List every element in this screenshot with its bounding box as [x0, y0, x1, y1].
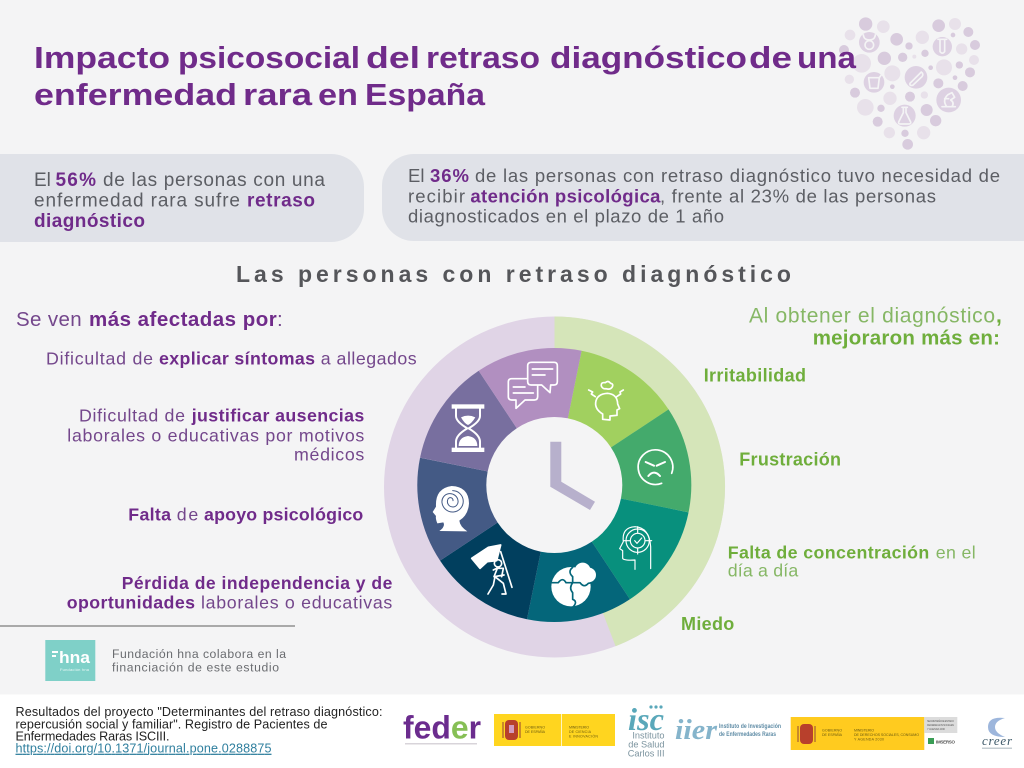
- left item: explicar síntomas: Dificultad de: [46, 348, 153, 368]
- logo: Gobierno de España, Ministerio de Ciencia: MINISTERIO: [569, 726, 589, 730]
- logo: feder: feder: [403, 710, 481, 746]
- left item: justificar ausencias: justificar ausencias: [191, 406, 364, 426]
- right item: Falta de concentración: Falta de concentración: [728, 542, 929, 562]
- logo: Gobierno de España, Ministerio de Derechos Sociales: IMSERSO: [936, 740, 955, 744]
- left item: justificar ausencias: médicos: [294, 445, 364, 465]
- wheel segments: [387, 317, 722, 653]
- text: Fundación hna note: [112, 647, 286, 675]
- logo: Gobierno de España, Ministerio de Ciencia: DE CIENCIA: [569, 730, 592, 734]
- title: de: [749, 40, 792, 75]
- logo: Instituto de Salud Carlos III: [628, 701, 664, 758]
- logo: Gobierno de España, Ministerio de Ciencia: GOBIERNO: [525, 726, 545, 730]
- panel: 36% stat: 36%: [430, 165, 469, 186]
- logo: Gobierno de España, Ministerio de Derechos Sociales: SECRETARÍA DE ESTADO: [927, 719, 954, 723]
- logo: Gobierno de España, Ministerio de Derechos Sociales: GOBIERNO: [822, 728, 842, 732]
- logo: Instituto de Investigación de Enfermedades Raras: iier: [675, 715, 718, 746]
- left column heading: más afectadas por: [89, 308, 277, 331]
- right column heading: [749, 304, 1002, 349]
- icon: hourglass: [452, 404, 484, 452]
- title: una: [797, 40, 857, 75]
- panel: 36% stat: [382, 154, 1024, 241]
- text: footer source: repercusión social y familiar". Registro de Pacientes de: [16, 717, 328, 731]
- right item: Falta de concentración: día a día: [728, 561, 798, 581]
- title: psicosocial: [178, 40, 360, 75]
- chart: clock wheel: [384, 316, 725, 658]
- panel: 36% stat: atención psicológica: [470, 185, 661, 206]
- wheel icons: [433, 362, 673, 607]
- panel: 56% stat: 56%: [56, 170, 96, 191]
- text: Fundación hna note: financiación de este estudio: [112, 661, 279, 675]
- title: rara: [243, 77, 313, 112]
- left item: justificar ausencias: [67, 406, 364, 465]
- logo: Instituto de Investigación de Enfermedades Raras: [675, 715, 781, 746]
- logo: Gobierno de España, Ministerio de Derechos Sociales: Y AGENDA 2030: [854, 738, 884, 742]
- left item: explicar síntomas: a allegados: [321, 348, 417, 368]
- right column heading: mejoraron más en:: [813, 326, 1000, 349]
- title: diagnóstico: [550, 40, 747, 75]
- right item: Frustración: Frustración: [739, 450, 841, 470]
- icon: puzzle: [551, 563, 596, 607]
- icon: person with flag: [472, 545, 512, 594]
- right item: Falta de concentración: [728, 542, 976, 581]
- panel: 36% stat: , frente al 23% de las personas: [660, 185, 936, 206]
- footer background: [0, 694, 1024, 768]
- left item: pérdida de independencia: Pérdida de independencia y de: [122, 573, 393, 593]
- panel: 36% stat: El: [408, 165, 424, 186]
- panel: 36% stat: de las personas con retraso diagnóstico tuvo necesidad de: [475, 165, 1000, 186]
- logo: Fundación hna: [45, 640, 95, 681]
- panel: 36% stat: diagnosticados en el plazo de 1 año: [408, 205, 724, 226]
- icon: head with spiral: [433, 486, 469, 531]
- heading: Las personas con retraso diagnóstico: Las personas con retraso diagnóstico: [236, 261, 791, 287]
- text: footer source: Resultados del proyecto "Determinantes del retraso diagnóstico:: [16, 705, 382, 719]
- panel: 56% stat: de las personas con una: [103, 170, 325, 191]
- icon: speech bubbles: [508, 362, 557, 408]
- panel: 56% stat: retraso: [247, 191, 315, 212]
- text: footer source: Enfermedades Raras ISCIII.: [16, 730, 170, 744]
- logo: Gobierno de España, Ministerio de Derechos Sociales: DE ESPAÑA: [822, 732, 843, 737]
- left item: apoyo psicológico: apoyo psicológico: [204, 505, 363, 525]
- logo: Instituto de Salud Carlos III: de Salud: [628, 740, 664, 750]
- icon: heart of dots with science icons: [839, 17, 980, 150]
- logo: Gobierno de España, Ministerio de Ciencia: [494, 714, 615, 746]
- left item: pérdida de independencia: oportunidades: [67, 592, 195, 612]
- logo: Instituto de Investigación de Enfermedades Raras: Instituto de Investigación: [719, 724, 781, 730]
- left item: justificar ausencias: laborales o educativas por motivos: [67, 426, 364, 446]
- logo: Fundación hna: hna: [59, 648, 91, 667]
- left item: apoyo psicológico: de: [177, 505, 198, 525]
- icon: irritated head: [589, 381, 623, 420]
- logo: Gobierno de España, Ministerio de Ciencia: DE ESPAÑA: [525, 729, 546, 734]
- logo: Instituto de Salud Carlos III: Instituto: [632, 730, 664, 740]
- logo: creer: [982, 718, 1013, 749]
- left item: pérdida de independencia: laborales o educativas: [201, 592, 392, 612]
- title: Impacto: [34, 40, 170, 75]
- logo: Gobierno de España, Ministerio de Ciencia: E INNOVACIÓN: [569, 734, 598, 738]
- text: footer source: [16, 705, 382, 756]
- title: en: [318, 77, 358, 112]
- logo: Fundación hna: Fundación hna: [60, 667, 90, 672]
- title: enfermedad: [34, 77, 237, 112]
- right item: Falta de concentración: en el: [936, 542, 976, 562]
- logo: Gobierno de España, Ministerio de Derechos Sociales: DE DERECHOS SOCIALES, CONSUMO: [854, 733, 919, 737]
- panel: 36% stat: recibir: [408, 185, 465, 206]
- logo: Gobierno de España, Ministerio de Derechos Sociales: DE DERECHOS SOCIALES: [927, 723, 954, 727]
- logo: Gobierno de España, Ministerio de Derechos Sociales: [791, 717, 957, 750]
- right item: Irritabilidad: Irritabilidad: [704, 366, 806, 386]
- right item: Miedo: Miedo: [681, 614, 734, 634]
- logo: Gobierno de España, Ministerio de Derechos Sociales: MINISTERIO: [854, 728, 874, 732]
- left column heading: :: [277, 308, 283, 331]
- panel: 56% stat: [0, 154, 364, 242]
- left column heading: Se ven: [16, 308, 82, 331]
- left item: justificar ausencias: Dificultad de: [79, 406, 185, 426]
- left item: pérdida de independencia: [67, 573, 393, 612]
- panel: 56% stat: enfermedad rara sufre: [34, 191, 240, 212]
- clock hands: [550, 442, 595, 510]
- logo: Instituto de Investigación de Enfermedades Raras: de Enfermedades Raras: [719, 732, 777, 738]
- right column heading: ,: [996, 304, 1002, 327]
- title: retraso: [426, 40, 540, 75]
- logo: Instituto de Salud Carlos III: Carlos III: [628, 748, 664, 758]
- panel: 56% stat: El: [34, 170, 51, 191]
- logo: creer: creer: [982, 733, 1013, 748]
- right column heading: Al obtener el diagnóstico: [749, 304, 995, 327]
- outer ring: [384, 316, 725, 658]
- title: [34, 40, 857, 112]
- icon: head with target: [620, 527, 652, 569]
- left item: apoyo psicológico: Falta: [128, 505, 171, 525]
- logo: Gobierno de España, Ministerio de Derechos Sociales: Y AGENDA 2030: [927, 727, 946, 731]
- title: España: [365, 77, 486, 112]
- title: del: [366, 40, 420, 75]
- panel: 56% stat: diagnóstico: [34, 211, 145, 232]
- left item: explicar síntomas: explicar síntomas: [159, 348, 315, 368]
- text: footer source: https://doi.org/10.1371/journal.pone.0288875: [16, 742, 272, 756]
- text: Fundación hna note: Fundación hna colabora en la: [112, 647, 286, 661]
- logo: Instituto de Salud Carlos III: isc: [628, 701, 664, 737]
- icon: angry face: [638, 450, 673, 484]
